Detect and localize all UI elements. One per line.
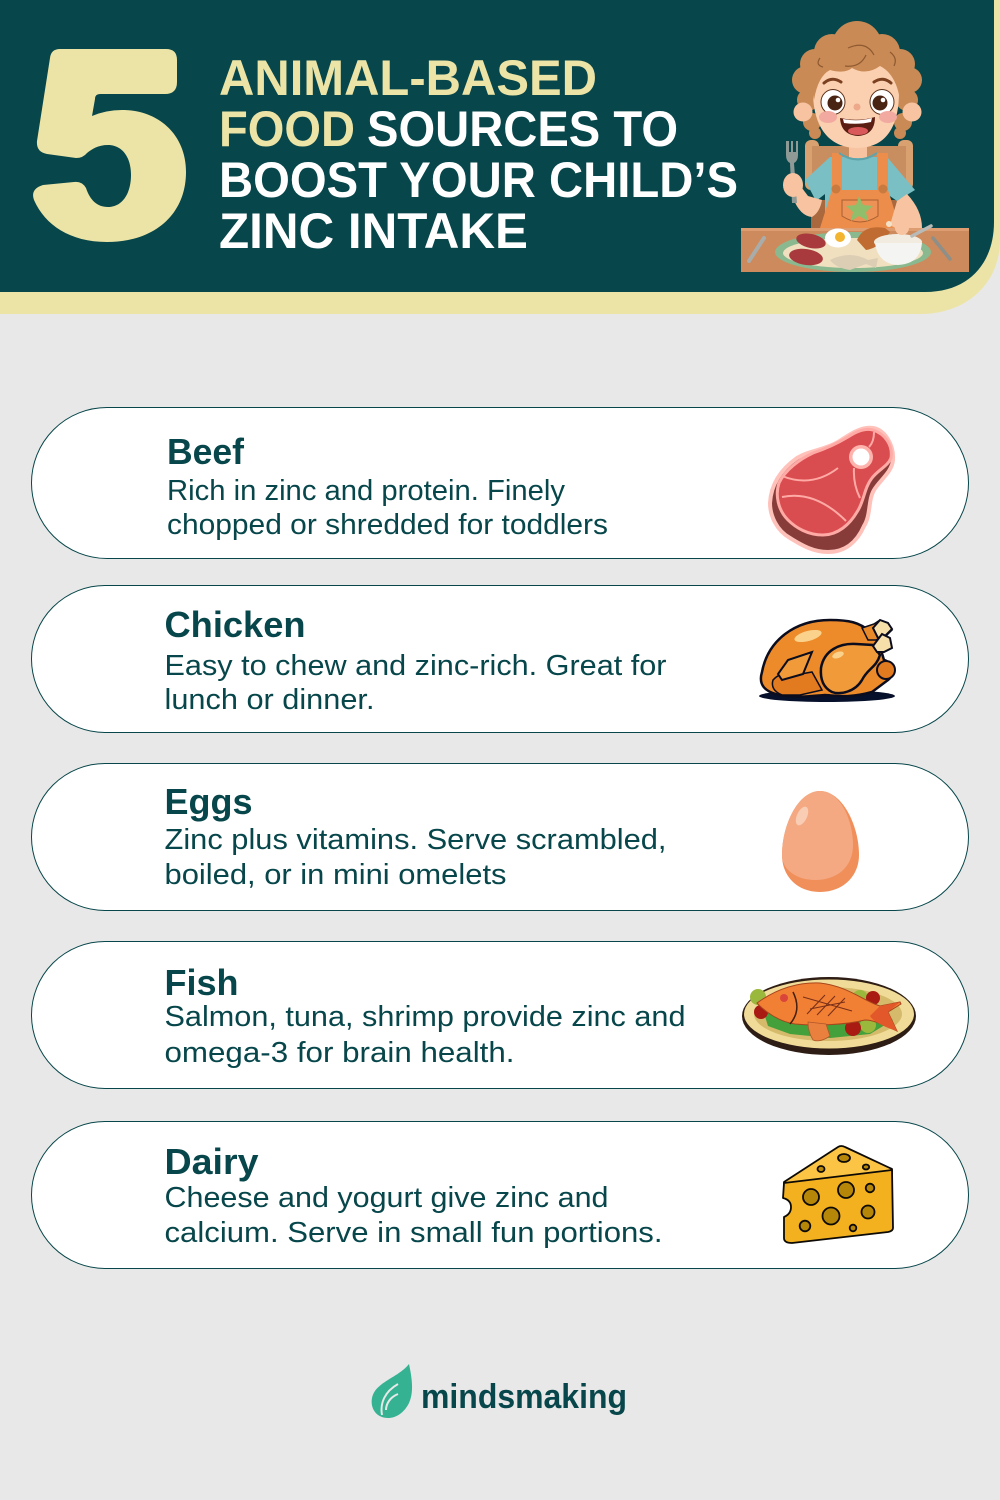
- text: beef description: [167, 475, 608, 541]
- text: beef description: chopped or shredded for toddlers: [167, 509, 608, 541]
- panel: fish: [32, 942, 968, 1088]
- panel: beef: [32, 408, 968, 558]
- wordmark: mindsmaking: [421, 1378, 627, 1416]
- icon: egg: [782, 791, 859, 892]
- title: FOOD: [219, 101, 355, 157]
- panel: eggs: [32, 764, 968, 910]
- text: fish description: omega-3 for brain health.: [164, 1037, 514, 1069]
- text: dairy description: Cheese and yogurt give zinc and: [164, 1182, 608, 1214]
- text: eggs description: boiled, or in mini omelets: [164, 859, 506, 891]
- text: beef description: Rich in zinc and protein. Finely: [167, 475, 565, 507]
- text: dairy description: [164, 1182, 662, 1249]
- text: chicken description: Easy to chew and zinc-rich. Great for: [164, 650, 667, 682]
- big number 5: [33, 49, 186, 242]
- text: eggs description: Zinc plus vitamins. Serve scrambled,: [164, 824, 666, 856]
- title: ANIMAL-BASED: [219, 50, 597, 106]
- text: fish description: Salmon, tuna, shrimp provide zinc and: [164, 1001, 686, 1033]
- title: BOOST YOUR CHILD’S: [219, 152, 738, 208]
- heading: fish: Fish: [164, 962, 238, 1003]
- icon: beef steak: [770, 428, 893, 552]
- panel: chicken: [32, 586, 968, 732]
- heading: dairy: Dairy: [164, 1141, 258, 1182]
- title: SOURCES TO: [367, 101, 678, 157]
- title: [219, 50, 738, 259]
- text: chicken description: [164, 650, 667, 716]
- title: ZINC INTAKE: [219, 203, 528, 259]
- heading: eggs: Eggs: [164, 781, 252, 822]
- icon: fish on plate: [742, 977, 916, 1055]
- icon: cheese wedge: [783, 1146, 893, 1243]
- icon: child eating at table: [741, 21, 969, 272]
- text: eggs description: [164, 824, 666, 891]
- text: fish description: [164, 1001, 686, 1069]
- heading: chicken: Chicken: [164, 604, 306, 645]
- heading: beef: Beef: [167, 431, 245, 472]
- icon: leaf: [372, 1364, 412, 1418]
- logo: mindsmaking: [372, 1364, 627, 1418]
- text: dairy description: calcium. Serve in small fun portions.: [164, 1217, 662, 1249]
- text: chicken description: lunch or dinner.: [164, 684, 374, 716]
- icon: roast chicken: [759, 620, 895, 702]
- panel: dairy: [32, 1122, 968, 1268]
- header banner: [0, 0, 1000, 314]
